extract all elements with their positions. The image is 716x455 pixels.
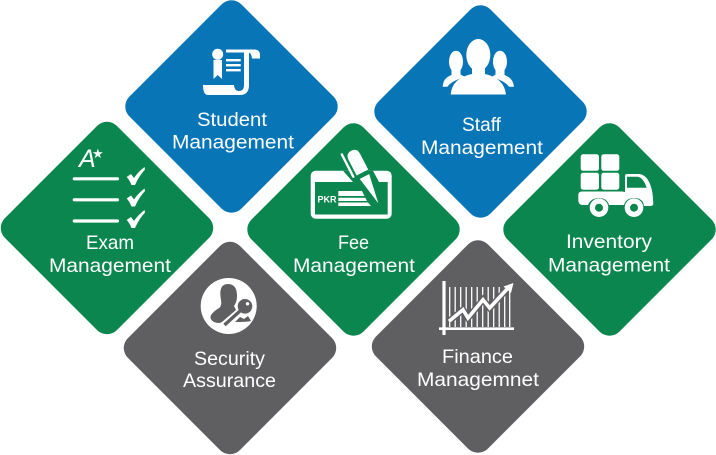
panel: exam management [0, 116, 219, 340]
label: staff management [421, 114, 544, 159]
panel: staff management [368, 0, 593, 224]
icon: graded checklist: ★ [92, 147, 104, 162]
panel: inventory management [497, 117, 716, 342]
label: fee management [293, 232, 416, 277]
icon: rising line chart [439, 281, 514, 335]
label: student management: Management [172, 132, 295, 154]
label: fee management: Fee [338, 232, 369, 254]
label: fee management: Management [293, 255, 416, 277]
label: staff management: Staff [462, 114, 502, 136]
icon: delivery truck with boxes [578, 154, 653, 217]
panel: finance management [366, 234, 590, 455]
label: student management [172, 109, 295, 154]
panel: student management [119, 0, 344, 219]
label: finance management [417, 346, 540, 391]
label: security assurance: Assurance [183, 370, 276, 392]
icon: three people [443, 39, 514, 94]
icon: graded checklist: A [77, 145, 96, 173]
label: security assurance: Security [194, 348, 265, 370]
label: security assurance [183, 348, 276, 392]
label: exam management: Exam [86, 232, 134, 254]
label: exam management [49, 232, 172, 277]
label: inventory management: Management [548, 254, 671, 276]
icon: graded checklist [73, 145, 145, 228]
panel: security assurance [118, 236, 342, 455]
panel: fee management [241, 117, 466, 342]
icon: PKR card and pen: PKR [318, 194, 337, 204]
label: inventory management: Inventory [566, 231, 652, 253]
icon: PKR card and pen [311, 147, 392, 219]
label: exam management: Management [49, 255, 172, 277]
label: staff management: Management [421, 137, 544, 159]
label: inventory management [548, 231, 671, 276]
label: student management: Student [197, 109, 268, 131]
icon: scroll with certificate ribbon [203, 49, 260, 95]
label: finance management: Finance [442, 346, 513, 368]
icon: person with key in circle [201, 278, 257, 334]
label: finance management: Managemnet [417, 369, 540, 391]
